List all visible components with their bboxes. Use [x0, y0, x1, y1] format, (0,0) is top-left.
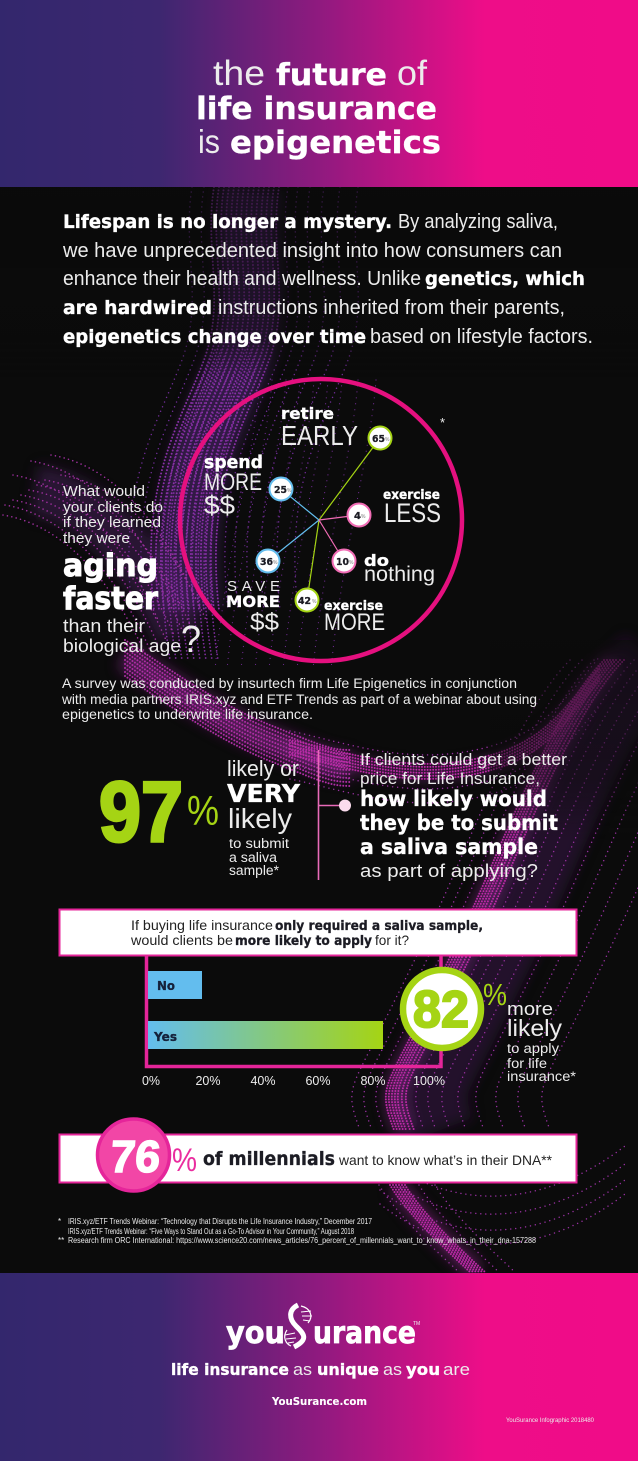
title — [196, 54, 441, 161]
label: save more: $$ — [250, 609, 279, 636]
bubble 4%: 4 — [354, 511, 361, 522]
bar chart — [142, 950, 445, 1088]
bubble 25%: 25 — [274, 485, 287, 496]
footnotes: IRIS.xyz/ETF Trends Webinar: “Technology that Disrupts the Life Insurance Industry,” December 2017 — [68, 1217, 372, 1226]
intro paragraph — [62, 211, 593, 348]
bubble 4% — [348, 504, 370, 526]
bubble 42%: 42 — [298, 596, 311, 607]
axis labels: 0% — [142, 1074, 160, 1088]
intro paragraph: are hardwired — [63, 297, 212, 319]
tagline: unique — [317, 1360, 379, 1379]
title: of — [397, 54, 427, 93]
stat: 97%: likely or — [227, 756, 299, 781]
stat: 76% of millennials: of millennials — [203, 1148, 335, 1170]
label: exercise more: MORE — [324, 609, 385, 636]
stat: 76% of millennials — [60, 1119, 576, 1191]
label: do nothing: nothing — [364, 563, 435, 586]
footnotes: * — [58, 1217, 61, 1226]
label: spend more — [204, 453, 263, 520]
survey description: A survey was conducted by insurtech firm Life Epigenetics in conjunction — [62, 675, 517, 691]
label: save more: SAVE — [227, 578, 280, 595]
stat: 97%: 97 — [99, 765, 183, 860]
footnotes — [58, 1217, 536, 1245]
bar: Yes: Yes — [153, 1030, 177, 1044]
left question text: if they learned — [63, 514, 161, 531]
stat: 97%: VERY — [227, 779, 301, 808]
bubble 36%: 36 — [260, 557, 273, 568]
stat: 76% of millennials: 76 — [108, 1131, 163, 1182]
label: exercise less — [383, 488, 441, 528]
question box: more likely to apply — [235, 934, 372, 949]
bubble 65%: % — [385, 437, 390, 443]
stat: 97%: likely — [228, 803, 292, 834]
website: YouSurance.com — [271, 1395, 367, 1408]
title: life insurance — [196, 91, 437, 127]
footnotes: ** — [58, 1236, 64, 1245]
intro paragraph: instructions inherited from their parents, — [218, 297, 565, 319]
stat: 82%: to apply — [507, 1041, 559, 1056]
tagline: as — [293, 1360, 312, 1379]
label: spend more: $$ — [204, 490, 236, 520]
intro paragraph: epigenetics change over time — [63, 326, 366, 348]
survey description: epigenetics to underwrite life insurance. — [62, 706, 313, 722]
stat: 97%: to submit — [229, 836, 289, 851]
title: epigenetics — [230, 125, 441, 161]
bar: Yes — [148, 1021, 383, 1049]
stat: 97%: sample* — [229, 863, 280, 878]
question text: If clients could get a better — [360, 751, 568, 769]
left question text: your clients do — [63, 499, 163, 516]
question text: they be to submit — [360, 811, 558, 835]
bubble 10% — [332, 550, 356, 572]
question box: would clients be — [130, 932, 233, 948]
stat: 82%: more — [507, 999, 553, 1019]
bar: No: No — [157, 979, 175, 993]
bubble 65%: 65 — [372, 434, 385, 445]
logo — [226, 1305, 420, 1351]
title: the — [213, 54, 265, 93]
stat: 82%: % — [483, 977, 507, 1012]
header band — [0, 0, 638, 187]
bar: No — [148, 971, 202, 999]
left question text: aging — [63, 548, 158, 584]
left question text — [63, 483, 201, 661]
axis labels: 20% — [195, 1074, 221, 1088]
stat: 82%: for life — [507, 1056, 547, 1071]
label: retire early: retire — [281, 404, 334, 423]
bubble 36%: % — [273, 560, 278, 566]
axis labels: 80% — [360, 1074, 386, 1088]
tagline: as — [383, 1360, 402, 1379]
question text — [360, 751, 568, 881]
axis labels — [142, 1074, 445, 1088]
bubble 42% — [296, 588, 318, 612]
stat: 76% of millennials: want to know what’s in their DNA** — [338, 1152, 553, 1168]
stat: 82% — [403, 970, 577, 1084]
intro paragraph: genetics, which — [425, 268, 585, 290]
question box: only required a saliva sample, — [275, 919, 483, 934]
spokes — [268, 438, 380, 600]
question text: how likely would — [360, 787, 547, 811]
tagline: you — [406, 1360, 440, 1379]
stat: 97%: % — [187, 787, 219, 834]
question box: for it? — [375, 932, 409, 948]
intro paragraph: enhance their health and wellness. Unlike — [63, 268, 421, 290]
logo: TM — [413, 1321, 420, 1327]
label: save more: MORE — [226, 592, 280, 611]
intro paragraph: By analyzing saliva, — [398, 211, 558, 233]
stat: 97% — [99, 756, 301, 878]
survey description: with media partners IRIS.xyz and ETF Trends as part of a webinar about using — [61, 691, 537, 707]
tagline — [171, 1360, 470, 1379]
label: exercise more: exercise — [324, 599, 383, 614]
divider with dot — [318, 750, 351, 880]
bubble 10%: 10 — [336, 557, 349, 568]
bubble 42%: % — [312, 599, 317, 605]
asterisk: * — [440, 415, 445, 430]
label: retire early — [281, 404, 358, 451]
tagline: are — [443, 1360, 470, 1379]
stat: 76% of millennials: % — [172, 1142, 197, 1178]
question text: price for Life Insurance, — [360, 770, 540, 788]
label: exercise more — [324, 599, 385, 636]
bubble 4%: % — [361, 514, 366, 520]
stat: 97%: a saliva — [229, 850, 278, 865]
bubble 25% — [270, 478, 292, 500]
logo: you — [226, 1316, 285, 1351]
bubble 25%: % — [287, 488, 292, 494]
question box: If buying life insurance — [131, 917, 273, 933]
axis labels: 100% — [413, 1074, 445, 1088]
bubble 10%: % — [349, 560, 354, 566]
axis labels: 40% — [250, 1074, 276, 1088]
footnotes: IRIS.xyz/ETF Trends Webinar: “Five Ways to Stand Out as a Go-To Advisor in Your Community,” August 2018 — [68, 1227, 354, 1236]
left question text: biological age — [63, 636, 181, 656]
stat: 82%: insurance* — [507, 1069, 577, 1084]
tagline: life insurance — [171, 1360, 289, 1379]
question box — [60, 910, 576, 956]
intro paragraph: we have unprecedented insight into how consumers can — [62, 240, 562, 262]
left question text: faster — [63, 581, 159, 617]
question text: as part of applying? — [360, 860, 538, 881]
axis labels: 60% — [305, 1074, 331, 1088]
footer band — [0, 1273, 638, 1461]
label: do nothing: do — [364, 551, 389, 570]
left question text: ? — [181, 619, 201, 661]
label: exercise less: exercise — [383, 488, 440, 503]
stat: 82%: 82 — [413, 981, 469, 1039]
question text: a saliva sample — [360, 835, 538, 859]
survey description — [61, 675, 537, 722]
label: save more — [226, 578, 280, 636]
footnotes: Research firm ORC International: https://www.science20.com/news_articles/76_percent_of_millennials_want_to_know_whats_in_their_dna-157288 — [68, 1236, 536, 1245]
left question text: What would — [63, 483, 145, 500]
icon: DNA letter S — [285, 1305, 312, 1347]
infographic id: YouSurance Infographic 2018480 — [506, 1417, 594, 1424]
left question text: they were — [63, 530, 130, 547]
intro paragraph: Lifespan is no longer a mystery. — [63, 211, 392, 233]
title: future — [276, 58, 387, 93]
label: exercise less: LESS — [384, 498, 441, 528]
stat: 82%: likely — [507, 1015, 563, 1041]
bubble 65% — [368, 426, 392, 450]
survey circle chart — [180, 379, 462, 661]
left question text: than their — [63, 616, 145, 636]
title: is — [198, 123, 220, 160]
label: retire early: EARLY — [281, 420, 358, 451]
intro paragraph: based on lifestyle factors. — [370, 326, 593, 348]
logo: urance — [313, 1316, 416, 1351]
bubble 36% — [256, 550, 280, 572]
label: spend more: spend — [204, 453, 263, 473]
label: do nothing — [364, 551, 435, 586]
label: spend more: MORE — [204, 469, 262, 496]
